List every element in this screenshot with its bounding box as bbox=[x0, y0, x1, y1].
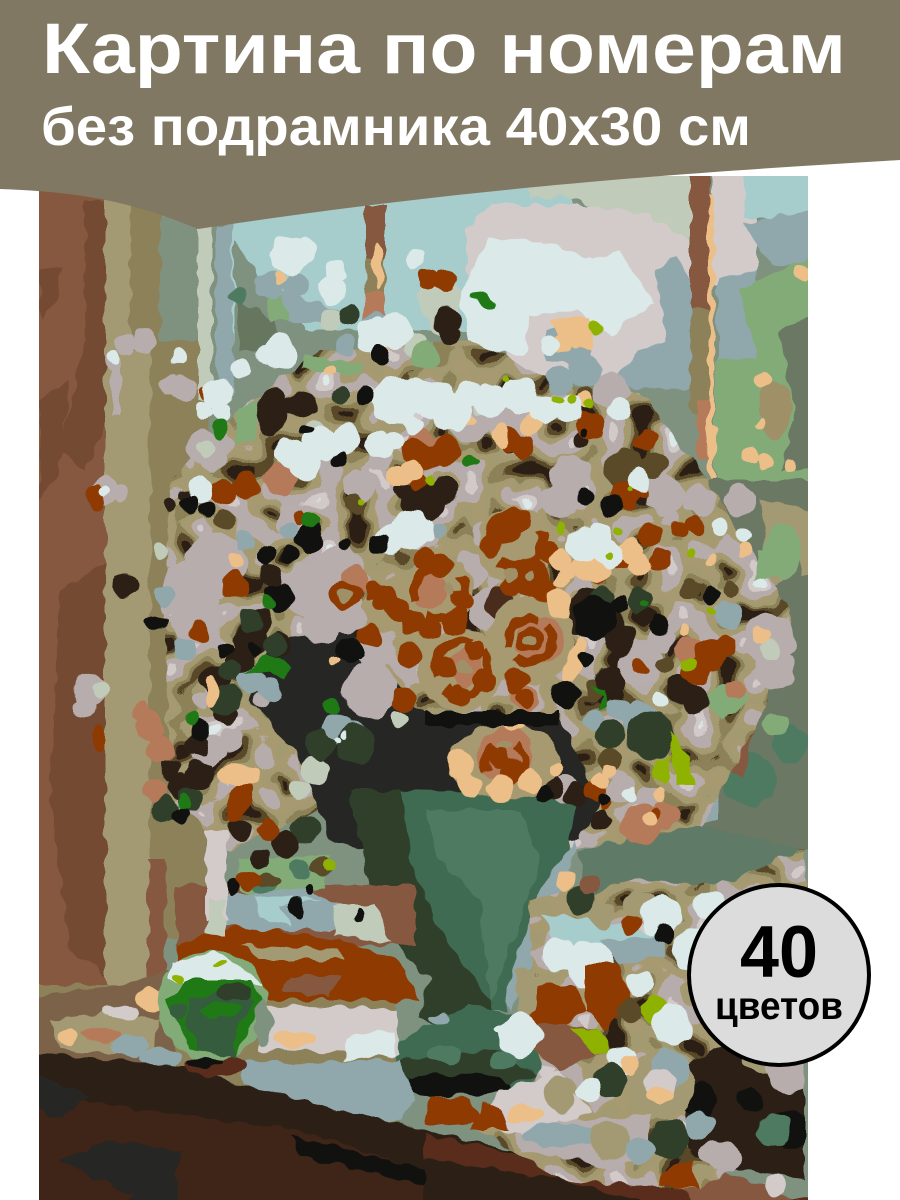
bouquet: inner tan of roses bbox=[336, 568, 536, 748]
badge label: цветов bbox=[715, 985, 843, 1028]
badge: 40 colours bbox=[689, 885, 869, 1065]
vase bbox=[350, 790, 580, 1096]
subtitle: без подрамника 40х30 см: без подрамника 40х30 см bbox=[41, 97, 751, 157]
bouquet: blue-grey and sage tones bbox=[155, 271, 777, 747]
bouquet: large tan rose bodies bbox=[362, 507, 574, 800]
banner shape bbox=[0, 0, 900, 229]
bouquet: bright green leaves bbox=[178, 290, 649, 809]
bouquet: white petals bbox=[100, 235, 752, 802]
dark interior of bouquet bbox=[250, 630, 600, 860]
lower right flowers bbox=[424, 825, 815, 1197]
title banner bbox=[0, 0, 900, 229]
bouquet: terracotta petals bbox=[130, 428, 745, 845]
bouquet: green leaves bbox=[235, 341, 790, 720]
painting: bouquet in a vase by a window bbox=[20, 160, 820, 1200]
wall and window background bbox=[20, 160, 820, 1200]
bouquet: rust orange petals bbox=[86, 269, 735, 889]
window sill and table bbox=[20, 885, 820, 1200]
bouquet: lime accents bbox=[359, 322, 717, 785]
green and blue foliage left of vase bbox=[205, 830, 390, 943]
bouquet: olive and dark accents bbox=[215, 450, 738, 772]
badge number: 40 bbox=[740, 912, 818, 993]
title line: Картина по номерам: Картина по номерам bbox=[42, 10, 846, 89]
bouquet: peach highlights bbox=[205, 241, 810, 828]
bouquet base tones bbox=[165, 340, 790, 850]
bouquet: black gaps bbox=[146, 346, 720, 823]
bouquet: mauve petals bbox=[73, 328, 796, 814]
apple jug on the sill bbox=[158, 950, 272, 1060]
bouquet: rose spiral rings bbox=[414, 513, 552, 782]
